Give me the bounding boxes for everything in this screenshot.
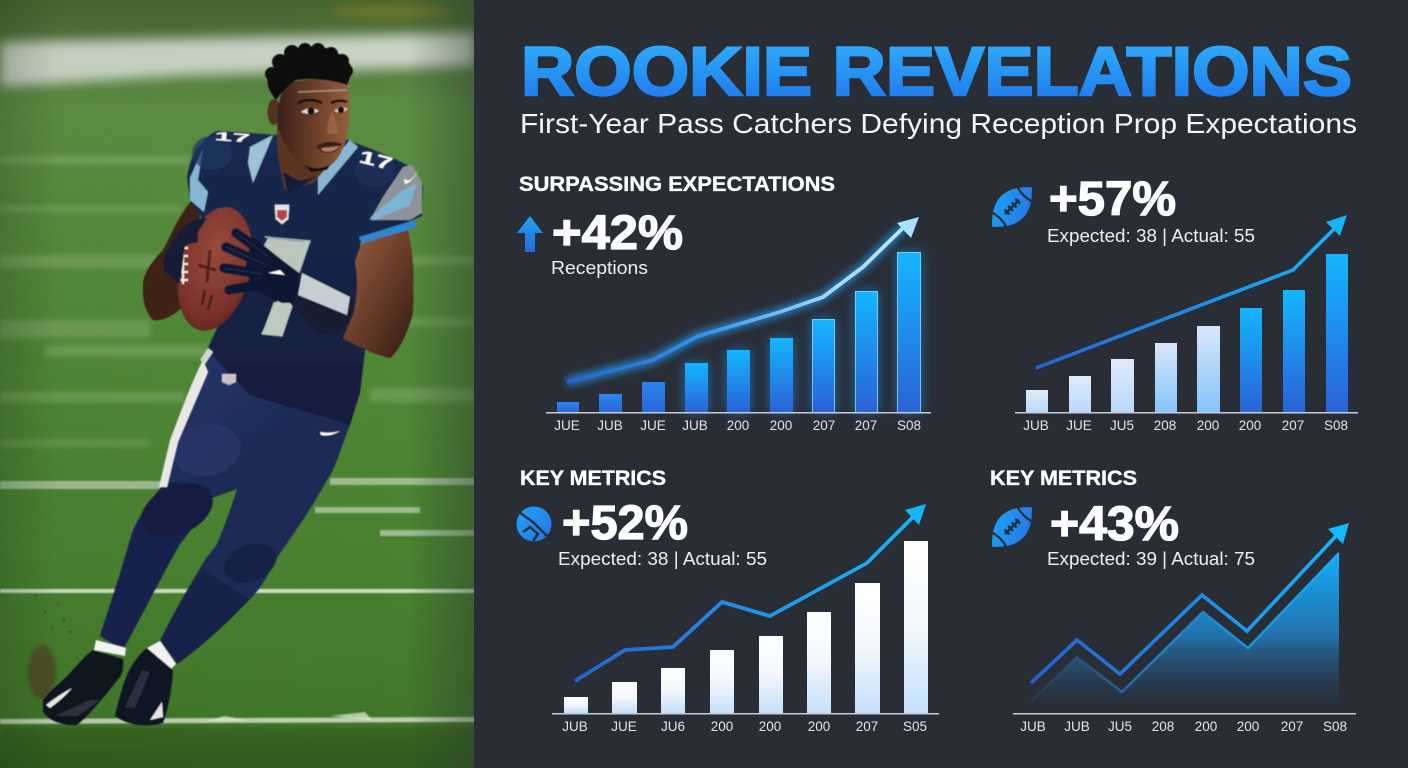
stat: +57%: +57% (1049, 173, 1176, 226)
caption: Expected: 39 | Actual: 75 (1047, 549, 1255, 569)
area chart with trend line: 208 (1152, 719, 1174, 734)
dirt kicked up (28, 595, 71, 699)
stat: +43%: +43% (1050, 498, 1179, 551)
bar chart with trend line: JUE (611, 719, 637, 734)
caption: Expected: 38 | Actual: 55 (558, 549, 767, 569)
area chart with trend line: S08 (1323, 719, 1347, 734)
wrist cuff and tape (287, 272, 353, 335)
football (166, 199, 264, 339)
bar chart with trend line: 208 (1154, 418, 1176, 433)
left glove (163, 218, 207, 284)
stat: +52%: +52% (562, 497, 688, 550)
bar chart with trend line: JUB (562, 719, 588, 734)
jersey numbers: 17 (357, 146, 395, 174)
bar chart with trend line: JUE (640, 418, 666, 433)
panel: surpassing expectations, reception chart (517, 173, 931, 433)
caption: Expected: 38 | Actual: 55 (1047, 226, 1255, 246)
jersey (187, 129, 423, 425)
right glove (224, 233, 300, 303)
panel: +57% chart (981, 173, 1358, 433)
panel: football field photo background (0, 0, 476, 768)
neck (277, 120, 347, 190)
title: ROOKIE REVELATIONS (521, 33, 1352, 110)
bar chart with trend line (1015, 215, 1358, 433)
rear leg and shoe (115, 425, 350, 725)
bar chart with trend line: 200 (808, 719, 830, 734)
bar chart with trend line: JU5 (1110, 418, 1134, 433)
panel: key metrics, +43% chart (981, 467, 1356, 734)
bar chart with trend line: JU6 (661, 719, 685, 734)
player: football player running with ball (28, 43, 423, 725)
heading: SURPASSING EXPECTATIONS (519, 173, 835, 196)
panel: dark stats background (474, 0, 1408, 768)
icon: up arrow (517, 216, 543, 252)
NFL shield (275, 205, 289, 224)
bar chart with trend line: S08 (897, 418, 921, 433)
bar chart with trend line: JUB (597, 418, 623, 433)
bar chart with trend line: 200 (727, 418, 749, 433)
area chart with trend line: 200 (1195, 719, 1217, 734)
bar chart with trend line: S05 (903, 719, 927, 734)
head (265, 43, 353, 172)
bar chart with trend line: JUE (554, 418, 580, 433)
near arm skin, left side (143, 200, 200, 320)
area chart with trend line (1013, 523, 1356, 734)
chest number 7 (262, 237, 310, 336)
bar chart with trend line (546, 217, 931, 433)
bar chart with trend line (552, 504, 939, 734)
area chart with trend line: JUB (1020, 719, 1046, 734)
bar chart with trend line: JUE (1066, 418, 1092, 433)
jersey: 17 (214, 129, 252, 146)
stat: +42%: +42% (552, 207, 683, 260)
area chart with trend line: JUB (1064, 719, 1090, 734)
far arm skin (343, 230, 414, 358)
bar chart with trend line: 207 (1282, 418, 1304, 433)
front leg and shoe (43, 345, 360, 725)
heading: KEY METRICS (520, 467, 666, 490)
heading: KEY METRICS (990, 467, 1137, 490)
subtitle: First-Year Pass Catchers Defying Reception Prop Expectations (520, 108, 1357, 139)
bar chart with trend line: 207 (855, 418, 877, 433)
bar chart with trend line: S08 (1324, 418, 1348, 433)
bar chart with trend line: 200 (1197, 418, 1219, 433)
area chart with trend line: 207 (1281, 719, 1303, 734)
bar chart with trend line: 200 (1239, 418, 1261, 433)
bar chart with trend line: 207 (856, 719, 878, 734)
icon: football (981, 496, 1043, 558)
bar chart with trend line: 200 (770, 418, 792, 433)
area chart with trend line: 200 (1237, 719, 1259, 734)
bar chart with trend line: JUB (1023, 418, 1049, 433)
bar chart with trend line: 200 (759, 719, 781, 734)
caption: Receptions (551, 258, 648, 278)
area chart with trend line: JU5 (1108, 719, 1132, 734)
icon: football (981, 176, 1043, 238)
bar chart with trend line: 207 (813, 418, 835, 433)
panel: key metrics, +52% chart (516, 467, 939, 734)
icon: ball badge (516, 506, 552, 542)
bar chart with trend line: 200 (711, 719, 733, 734)
hair (265, 43, 353, 100)
bar chart with trend line: JUB (682, 418, 708, 433)
